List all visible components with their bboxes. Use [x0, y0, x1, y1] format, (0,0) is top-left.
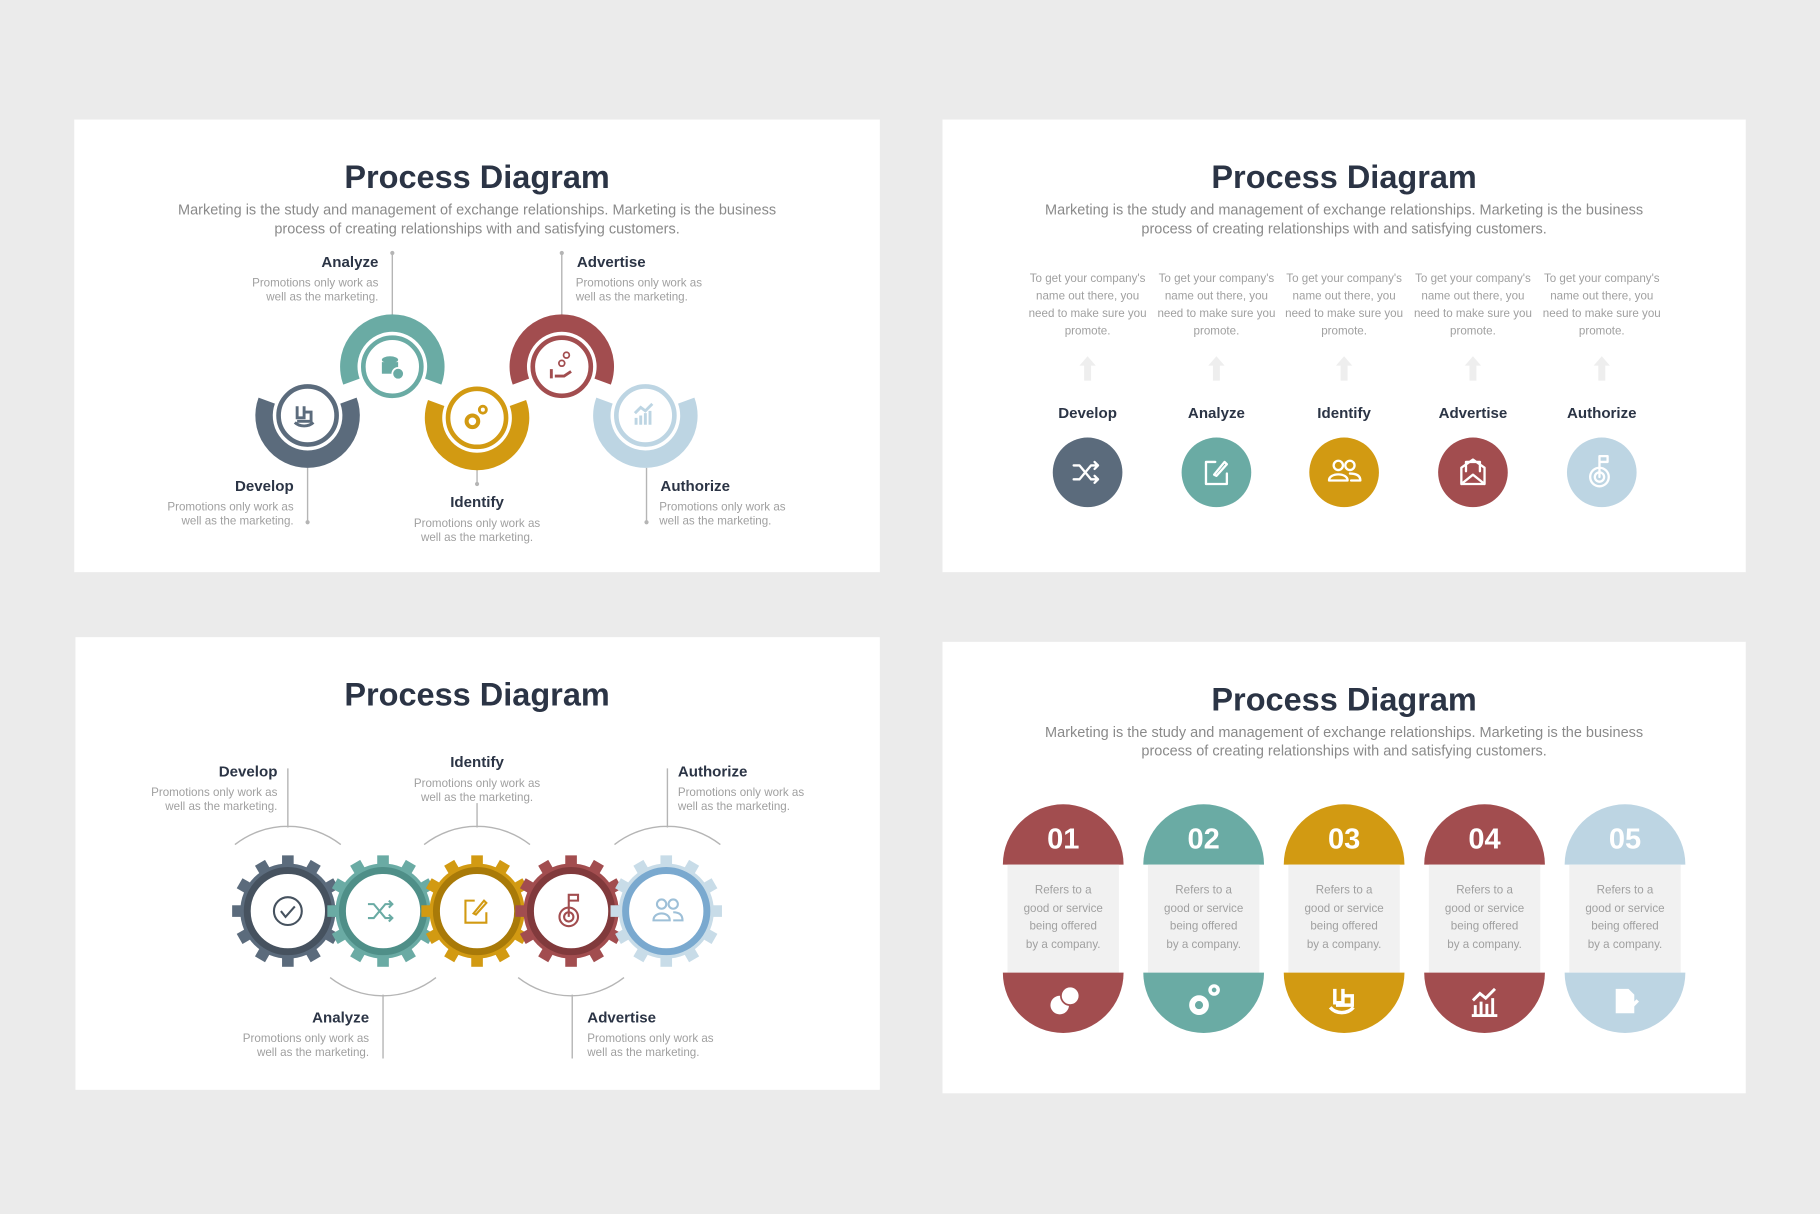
gear: Analyze — [327, 855, 439, 967]
icon: shuffle — [1053, 438, 1122, 507]
icon: target — [1567, 438, 1637, 507]
subtitle: process of creating relationships with and satisfying customers. — [274, 221, 680, 237]
title: Process Diagram — [1211, 681, 1477, 717]
label: Authorize: Promotions only work as — [678, 786, 804, 799]
step labels: Develop — [1058, 405, 1117, 422]
gear: Authorize — [611, 855, 722, 967]
card 02: by a company. — [1166, 938, 1241, 951]
descriptions: name out there, you — [1165, 289, 1268, 302]
label: Identify — [414, 494, 540, 544]
step labels — [1058, 405, 1637, 422]
card 02: being offered — [1170, 920, 1237, 933]
gear: Advertise — [515, 855, 627, 967]
title: Process Diagram — [344, 677, 610, 713]
card 03: being offered — [1310, 920, 1378, 933]
step: Advertise — [518, 323, 605, 396]
panel: numbered cards — [942, 642, 1746, 1093]
card 04: 04 — [1468, 823, 1501, 855]
card 03: Refers to a — [1316, 884, 1373, 897]
label: Analyze — [252, 254, 379, 304]
label: Advertise: Advertise — [587, 1009, 656, 1026]
panel: gears — [75, 637, 880, 1090]
descriptions: need to make sure you — [1157, 307, 1275, 320]
arrows up — [1079, 356, 1610, 381]
descriptions: promote. — [1065, 324, 1110, 337]
descriptions: To get your company's — [1286, 272, 1402, 285]
label: Identify — [414, 754, 540, 804]
card 01: good or service — [1024, 902, 1103, 915]
label: Identify: Promotions only work as — [414, 777, 540, 790]
descriptions: name out there, you — [1293, 289, 1396, 302]
label: Advertise: well as the marketing. — [575, 291, 688, 304]
subtitle: process of creating relationships with and satisfying customers. — [1141, 744, 1547, 760]
descriptions — [1029, 272, 1661, 337]
label: Analyze: Analyze — [312, 1009, 369, 1026]
gear: Identify — [421, 855, 533, 967]
label: Advertise: well as the marketing. — [586, 1046, 699, 1059]
label: Analyze: well as the marketing. — [256, 1046, 369, 1059]
label: Advertise — [575, 254, 702, 304]
label: Develop: well as the marketing. — [181, 515, 294, 528]
descriptions: need to make sure you — [1029, 307, 1147, 320]
card 04: Refers to a — [1456, 884, 1513, 897]
card 03 — [1284, 804, 1404, 1033]
card 05: good or service — [1585, 902, 1665, 915]
icon: users — [1309, 438, 1379, 507]
card 01: Refers to a — [1035, 884, 1092, 897]
descriptions: promote. — [1450, 324, 1496, 337]
title: Process Diagram — [1211, 159, 1477, 195]
label: Identify: Identify — [450, 754, 504, 771]
label: Advertise: Promotions only work as — [587, 1032, 714, 1045]
label: Authorize — [658, 478, 786, 528]
card 05: 05 — [1609, 823, 1641, 855]
label: Identify: well as the marketing. — [420, 791, 533, 804]
label: Authorize: well as the marketing. — [658, 515, 771, 528]
descriptions: To get your company's — [1030, 272, 1146, 285]
label: Develop: well as the marketing. — [164, 800, 277, 813]
subtitle: Marketing is the study and management of exchange relationships. Marketing is the business — [1045, 203, 1643, 219]
card 02: 02 — [1188, 823, 1220, 855]
label: Develop — [167, 478, 294, 528]
descriptions: need to make sure you — [1414, 307, 1532, 320]
card 03: 03 — [1328, 823, 1360, 855]
label: Analyze — [243, 1009, 369, 1059]
label: Authorize: well as the marketing. — [677, 800, 790, 813]
descriptions: need to make sure you — [1543, 307, 1661, 320]
label: Develop: Develop — [219, 763, 277, 780]
card 03: good or service — [1304, 902, 1384, 915]
descriptions: promote. — [1321, 324, 1367, 337]
label: Advertise: Advertise — [577, 254, 646, 271]
label: Identify: Identify — [450, 494, 504, 511]
descriptions: promote. — [1194, 324, 1239, 337]
label: Advertise: Promotions only work as — [576, 277, 702, 290]
label: Authorize — [677, 763, 804, 813]
step labels: Identify — [1317, 405, 1372, 422]
subtitle: process of creating relationships with and satisfying customers. — [1141, 221, 1547, 237]
icon: mail — [1438, 438, 1508, 507]
subtitle — [1045, 725, 1643, 760]
card 01: being offered — [1029, 920, 1097, 933]
card 04: being offered — [1451, 920, 1518, 933]
step: Develop — [264, 386, 351, 459]
card 02 — [1143, 804, 1264, 1033]
label: Analyze: Promotions only work as — [252, 277, 379, 290]
card 05: by a company. — [1588, 938, 1662, 951]
step labels: Authorize — [1567, 405, 1637, 422]
card 02: good or service — [1164, 902, 1243, 915]
step labels: Analyze — [1188, 405, 1245, 422]
label: Advertise — [586, 1009, 714, 1059]
label: Authorize: Promotions only work as — [659, 501, 786, 514]
icon: edit — [1182, 438, 1251, 507]
descriptions: name out there, you — [1550, 289, 1653, 302]
card 04 — [1424, 804, 1545, 1033]
panel: semicircle process — [74, 120, 880, 572]
label: Authorize: Authorize — [660, 478, 730, 495]
descriptions: To get your company's — [1544, 272, 1660, 285]
card 04: good or service — [1445, 902, 1524, 915]
subtitle — [178, 203, 776, 237]
step: Identify — [434, 389, 521, 461]
step labels: Advertise — [1439, 405, 1507, 422]
descriptions: To get your company's — [1415, 272, 1531, 285]
descriptions: name out there, you — [1036, 289, 1139, 302]
label: Develop: Promotions only work as — [167, 501, 294, 514]
connector arcs and lines — [235, 768, 720, 1058]
label: Analyze: well as the marketing. — [265, 291, 378, 304]
connector lines — [306, 251, 649, 524]
subtitle: Marketing is the study and management of exchange relationships. Marketing is the business — [1045, 725, 1643, 741]
label: Authorize: Authorize — [678, 763, 747, 780]
subtitle — [1045, 203, 1643, 237]
card 02: Refers to a — [1175, 884, 1233, 897]
title: Process Diagram — [344, 159, 610, 195]
panel: circle steps — [942, 120, 1746, 572]
subtitle: Marketing is the study and management of exchange relationships. Marketing is the business — [178, 203, 776, 219]
step: Analyze — [349, 323, 436, 396]
descriptions: need to make sure you — [1285, 307, 1403, 320]
label: Identify: Promotions only work as — [414, 517, 540, 530]
card 01 — [1003, 804, 1124, 1033]
card 05: Refers to a — [1597, 884, 1654, 897]
step: Authorize — [602, 386, 689, 459]
card 05: being offered — [1591, 920, 1659, 933]
label: Develop: Promotions only work as — [151, 786, 278, 799]
descriptions: promote. — [1579, 324, 1625, 337]
label: Analyze: Promotions only work as — [243, 1032, 369, 1045]
card 05 — [1565, 804, 1685, 1033]
card 01: by a company. — [1026, 938, 1100, 951]
label: Analyze: Analyze — [321, 254, 378, 271]
descriptions: name out there, you — [1421, 289, 1525, 302]
label: Identify: well as the marketing. — [420, 531, 533, 544]
descriptions: To get your company's — [1159, 272, 1274, 285]
label: Develop: Develop — [235, 478, 294, 495]
card 01: 01 — [1047, 823, 1079, 855]
gear: Develop — [232, 855, 344, 967]
label: Develop — [151, 763, 278, 813]
card 04: by a company. — [1447, 938, 1522, 951]
card 03: by a company. — [1307, 938, 1381, 951]
